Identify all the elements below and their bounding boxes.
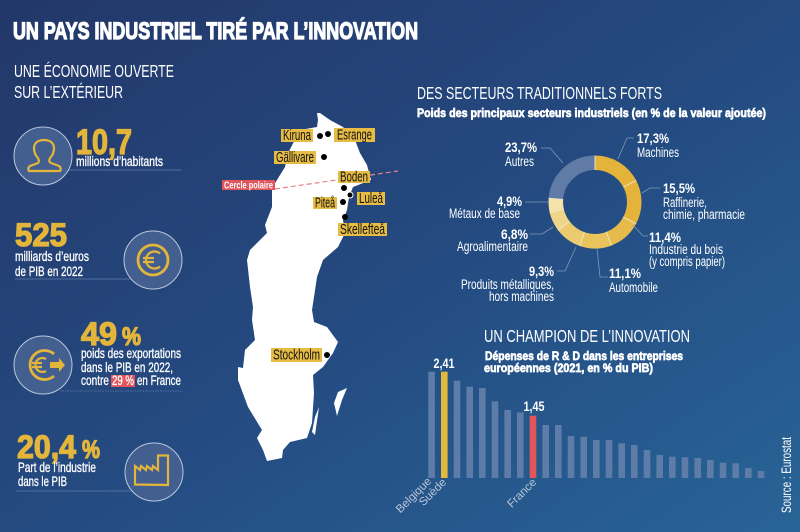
label: Produits métalliques: 9,3%	[529, 264, 554, 279]
figure: 49 %	[81, 316, 141, 352]
city: Esrange: Esrange	[337, 128, 372, 144]
city: Esrange	[325, 128, 375, 144]
label: Raffinerie: Raffinerie,	[663, 195, 707, 210]
figure: 49 %: 49	[81, 316, 117, 352]
mainland	[238, 113, 371, 461]
label: Métaux de base	[449, 194, 522, 221]
label: Métaux de base: 4,9%	[497, 194, 522, 209]
label: Produits métalliques	[461, 264, 554, 304]
heading: une économie ouverte: UNE ÉCONOMIE OUVERTE	[14, 61, 174, 81]
bars	[428, 372, 764, 478]
bar chart	[394, 356, 764, 516]
polar circle: Cercle polaire	[224, 180, 273, 192]
caption: poids des exportations: dans le PIB en 2022,	[81, 359, 173, 375]
map: Suède	[222, 113, 398, 461]
caption: milliards d'euros: milliards d’euros	[15, 248, 89, 264]
label: Automobile: 11,1%	[609, 266, 641, 281]
value: France: 1,45	[524, 399, 545, 414]
label: Métaux de base: Métaux de base	[449, 206, 520, 221]
label: Industrie du bois: 11,4%	[649, 230, 681, 245]
caption: poids des exportations: en France	[137, 372, 181, 388]
caption: milliards d'euros	[15, 248, 89, 279]
title: UN PAYS INDUSTRIEL TIRÉ PAR L’INNOVATION	[13, 17, 418, 45]
polar circle	[222, 171, 398, 192]
city: Piteå: Piteå	[315, 196, 336, 212]
caption: poids des exportations: contre	[81, 372, 109, 388]
figure: 525: 525	[15, 217, 67, 253]
panel: exportations	[14, 316, 182, 394]
axis labels	[394, 476, 539, 516]
label: Agroalimentaire	[457, 227, 528, 254]
figure: 10,7: 10,7	[76, 123, 132, 162]
label: Autres	[505, 140, 537, 169]
label: Produits métalliques: Produits métalliques,	[461, 277, 554, 292]
Gotland	[334, 388, 347, 416]
label: Machines	[637, 131, 679, 160]
city: Luleå	[347, 191, 385, 207]
segment separators	[549, 156, 636, 246]
caption: millions d'habitants: millions d’habitants	[76, 153, 163, 169]
subheading: dépenses de R&D: européennes (2021, en % du PIB)	[484, 361, 653, 375]
label: Industrie du bois: (y compris papier)	[649, 254, 725, 269]
label: Raffinerie: chimie, pharmacie	[663, 207, 745, 222]
heading: champion de l'innovation: UN CHAMPION DE L’INNOVATION	[484, 326, 690, 346]
figure: 20,4 %: %	[82, 436, 100, 464]
label: Raffinerie	[663, 181, 745, 222]
label: Industrie du bois: Industrie du bois	[649, 242, 723, 257]
caption: poids des exportations: poids des exportations	[81, 345, 181, 361]
source: Source : Eurostat	[779, 437, 794, 513]
figure: 20,4 %: 20,4	[17, 429, 76, 465]
value: Suède: 2,41	[434, 356, 455, 371]
city: Skellefteå	[338, 214, 387, 238]
panel: PIB	[15, 217, 182, 289]
city: Gällivare: Gällivare	[276, 150, 314, 166]
city: Kiruna: Kiruna	[283, 128, 312, 144]
city: Boden: Boden	[340, 170, 368, 186]
subheading: dépenses de R&D: Dépenses de R & D dans les entreprises	[485, 349, 683, 363]
heading: une économie ouverte	[14, 61, 174, 102]
caption: poids des exportations	[81, 345, 181, 388]
label: Autres: 23,7%	[505, 140, 537, 155]
axis labels: Belgique	[394, 476, 434, 516]
subheading: dépenses de R&D	[484, 349, 683, 375]
caption: part de l'industrie: dans le PIB	[18, 473, 67, 489]
panel: habitants	[14, 123, 182, 185]
label: Machines: Machines	[637, 145, 679, 160]
label: Agroalimentaire: Agroalimentaire	[457, 239, 528, 254]
label: Machines: 17,3%	[637, 131, 669, 146]
label: Automobile	[609, 266, 658, 295]
caption: poids des exportations: 29 %	[112, 372, 134, 388]
panel: industrie	[16, 429, 183, 501]
heading: une économie ouverte: SUR L’EXTÉRIEUR	[14, 82, 123, 102]
city: Stockholm: Stockholm	[273, 348, 320, 364]
city: Luleå: Luleå	[359, 191, 384, 207]
Öland	[312, 407, 319, 435]
subheading: poids des secteurs: Poids des principaux secteurs industriels (en % de la valeur ajoutée)	[417, 106, 766, 120]
caption: part de l'industrie: Part de l’industrie	[18, 459, 96, 475]
icon: factory	[135, 456, 168, 485]
city: Boden	[338, 170, 370, 191]
caption: part de l'industrie	[18, 459, 96, 489]
icon: person	[28, 140, 61, 171]
caption: milliards d'euros: de PIB en 2022	[15, 263, 83, 279]
donut chart	[449, 131, 745, 304]
heading: secteurs traditionnels: DES SECTEURS TRADITIONNELS FORTS	[417, 83, 662, 103]
label: Raffinerie: 15,5%	[663, 181, 695, 196]
axis labels: France	[505, 477, 539, 510]
label: Produits métalliques: hors machines	[489, 289, 554, 304]
label: Automobile: Automobile	[609, 280, 658, 295]
axis labels: Suède	[417, 477, 449, 509]
label: Agroalimentaire: 6,8%	[501, 227, 528, 242]
icon: euro coin	[138, 245, 168, 275]
icon: euro export	[30, 350, 65, 380]
figure: 49 %: %	[122, 323, 141, 351]
label: Industrie du bois	[649, 230, 725, 269]
leader lines	[525, 138, 660, 277]
donut rings	[556, 163, 634, 241]
label: Autres: Autres	[505, 154, 534, 169]
city: Skellefteå: Skellefteå	[340, 222, 386, 238]
